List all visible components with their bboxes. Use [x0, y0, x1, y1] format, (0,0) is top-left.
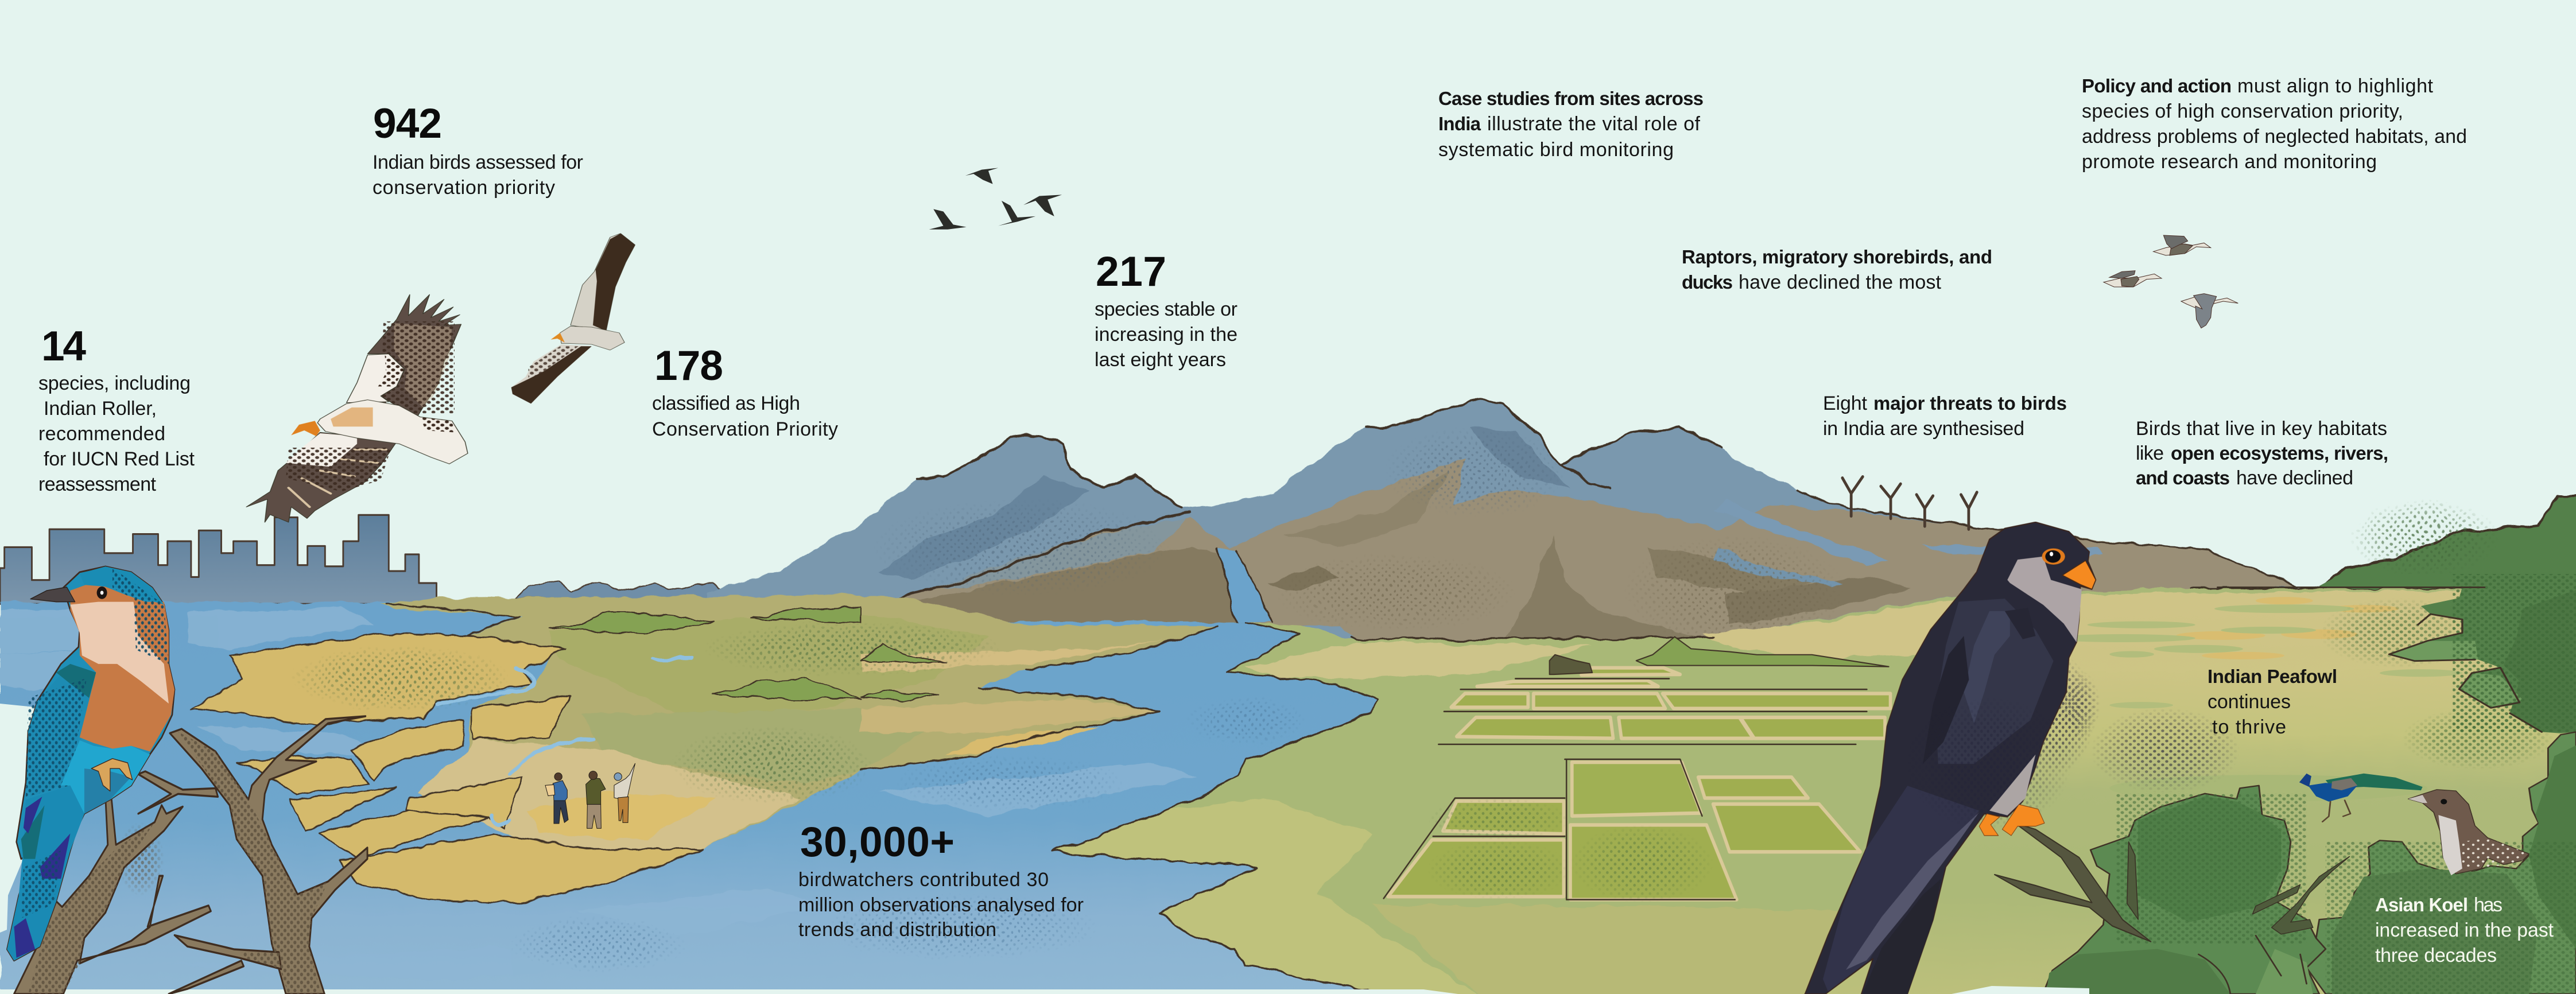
text: eight threats: Eight: [1823, 393, 1868, 414]
bird: Indian Roller: [7, 566, 174, 961]
text: key habitats: have declined: [2236, 467, 2353, 489]
text: raptors: [1682, 246, 1992, 293]
text: Indian Peafowl: [2208, 666, 2337, 738]
text: 217 stat: species stable or: [1095, 298, 1237, 320]
text: 942 stat: Indian birds assessed for: [373, 152, 583, 173]
text: raptors: ducks: [1682, 271, 1733, 293]
text: case studies: India: [1438, 113, 1481, 134]
text: eight threats: major threats to birds: [1873, 393, 2067, 414]
birdwatcher pointing: [614, 763, 635, 822]
background gap left of roller: [0, 704, 34, 933]
meadow colour streaks: [2049, 597, 2462, 802]
distant ridge: [516, 580, 736, 598]
text: case studies: [1438, 88, 1704, 161]
vulture: small: [511, 234, 635, 403]
text: case studies: Case studies from sites across: [1438, 88, 1704, 109]
bottom right paper edge: [1952, 986, 2089, 994]
text: eight threats: in India are synthesised: [1823, 418, 2024, 440]
vulture: large: [246, 294, 468, 522]
text: case studies: illustrate the vital role of: [1487, 113, 1701, 135]
forest: right block: [2218, 574, 2576, 733]
text: policy and action: [2082, 75, 2467, 173]
goose three: [2181, 294, 2238, 328]
text: 942 stat: 942: [373, 100, 442, 147]
flock: geese: [2104, 235, 2238, 328]
text: 217 stat: 217: [1096, 248, 1166, 295]
text: policy and action: species of high conservation priority,: [2082, 100, 2403, 122]
panel: landscape illustration: [0, 399, 2576, 994]
text: Asian Koel: has: [2474, 894, 2503, 916]
text: 217 stat: last eight years: [1095, 349, 1226, 371]
text: 178 stat: 178: [654, 343, 723, 389]
tree branches: [14, 716, 367, 994]
water halftone: [511, 697, 1307, 971]
birdwatchers: [545, 763, 635, 828]
panel: vultures: [246, 234, 635, 522]
forest: lower right block: [2307, 732, 2576, 994]
text: policy and action: must align to highlight: [2237, 75, 2434, 97]
text: 30,000+ stat: million observations analysed for: [798, 894, 1084, 916]
paddy fields: [1388, 668, 1891, 900]
forest: upper right canopy: [2322, 496, 2576, 631]
bird: falcon: [1805, 522, 2096, 994]
delta land: [379, 595, 1218, 879]
text: key habitats: Birds that live in key habitats: [2136, 418, 2387, 440]
text: 217 stat: increasing in the: [1095, 324, 1237, 345]
text: Asian Koel: three decades: [2375, 945, 2497, 966]
text: 30,000+ stat: birdwatchers contributed 30: [798, 869, 1049, 891]
text: 30,000+ stat: trends and distribution: [798, 919, 996, 941]
text: 14 stat: for IUCN Red List: [44, 448, 195, 470]
text: policy and action: promote research and monitoring: [2082, 151, 2377, 173]
text: 942 stat: conservation priority: [373, 177, 555, 199]
text: 178 stat: Conservation Priority: [652, 418, 838, 440]
panel: right meadow and forest: [2043, 574, 2576, 994]
text: 14 stat: 14: [41, 323, 86, 370]
bare branches in tree: [2127, 842, 2349, 934]
branch halftone: [117, 822, 164, 896]
text: key habitats: open ecosystems, rivers,: [2171, 442, 2388, 464]
text: Indian Peafowl: Indian Peafowl: [2208, 666, 2337, 687]
text: Asian Koel: [2375, 894, 2554, 966]
text: 14 stat: [38, 323, 195, 495]
text: policy and action: address problems of neglected habitats, and: [2082, 126, 2467, 147]
branch halftone texture: [28, 732, 328, 994]
text: 14 stat: recommended: [38, 423, 165, 445]
text: 14 stat: reassessment: [38, 473, 157, 495]
icon: wind turbines: [1842, 477, 1977, 529]
text: raptors: Raptors, migratory shorebirds, and: [1682, 246, 1992, 267]
paddy field halftone: [1436, 800, 1705, 899]
meadow halftone: [2059, 598, 2554, 794]
farmhouse: [1550, 655, 1592, 674]
river and coast water: [0, 602, 1421, 994]
birdwatcher with binoculars: [586, 771, 606, 828]
text: key habitats: [2136, 418, 2388, 489]
text: Indian Peafowl: continues: [2208, 691, 2291, 713]
farmland plain: [1053, 588, 2576, 994]
text: 14 stat: species, including: [38, 372, 191, 394]
text: 30,000+ stat: 30,000+: [800, 819, 955, 865]
bird: Asian Koel: [2408, 790, 2529, 875]
flock: dark birds: [929, 168, 1062, 230]
text: Indian Peafowl: to thrive: [2212, 716, 2286, 738]
treeline behind fields: [1636, 637, 1889, 667]
text: case studies: systematic bird monitoring: [1438, 139, 1674, 161]
water brush streaks: [0, 607, 1197, 980]
birdwatcher with notebook: [545, 773, 568, 824]
water channels: [439, 658, 692, 824]
bird: Indian Peafowl: [2299, 774, 2423, 822]
falcon perch branch: [1995, 823, 2151, 942]
text: 14 stat: Indian Roller,: [44, 398, 157, 420]
panel: fields and turbines: [1384, 477, 1977, 903]
text: key habitats: and coasts: [2136, 467, 2230, 488]
panel: Indian Roller on branches: [7, 566, 367, 994]
text: 217 stat: [1095, 248, 1237, 371]
text: policy and action: Policy and action: [2082, 75, 2232, 96]
text: 30,000+ stat: [798, 819, 1084, 941]
text: 942 stat: [373, 100, 583, 199]
text: 178 stat: [652, 343, 838, 440]
delta halftone: [291, 622, 999, 804]
field dark outlines: [1384, 678, 1867, 900]
panel: falcon with perch: [1805, 522, 2151, 994]
text: 178 stat: classified as High: [652, 393, 800, 414]
halftone behind falcon: [2023, 655, 2094, 773]
bottom paper edge: [0, 989, 1458, 994]
bushes on delta: [549, 605, 947, 701]
goose one: [2154, 235, 2211, 255]
city skyline: [0, 515, 445, 604]
text: raptors: have declined the most: [1739, 271, 1942, 293]
tree: mid foreground: [2043, 786, 2326, 994]
text: eight threats: [1823, 393, 2067, 440]
sand islands: [192, 634, 703, 903]
text: key habitats: like: [2136, 442, 2164, 464]
goose two: [2104, 271, 2162, 287]
text: Asian Koel: increased in the past: [2375, 919, 2554, 941]
text: Asian Koel: Asian Koel: [2375, 894, 2468, 915]
mountains: [708, 399, 2296, 649]
